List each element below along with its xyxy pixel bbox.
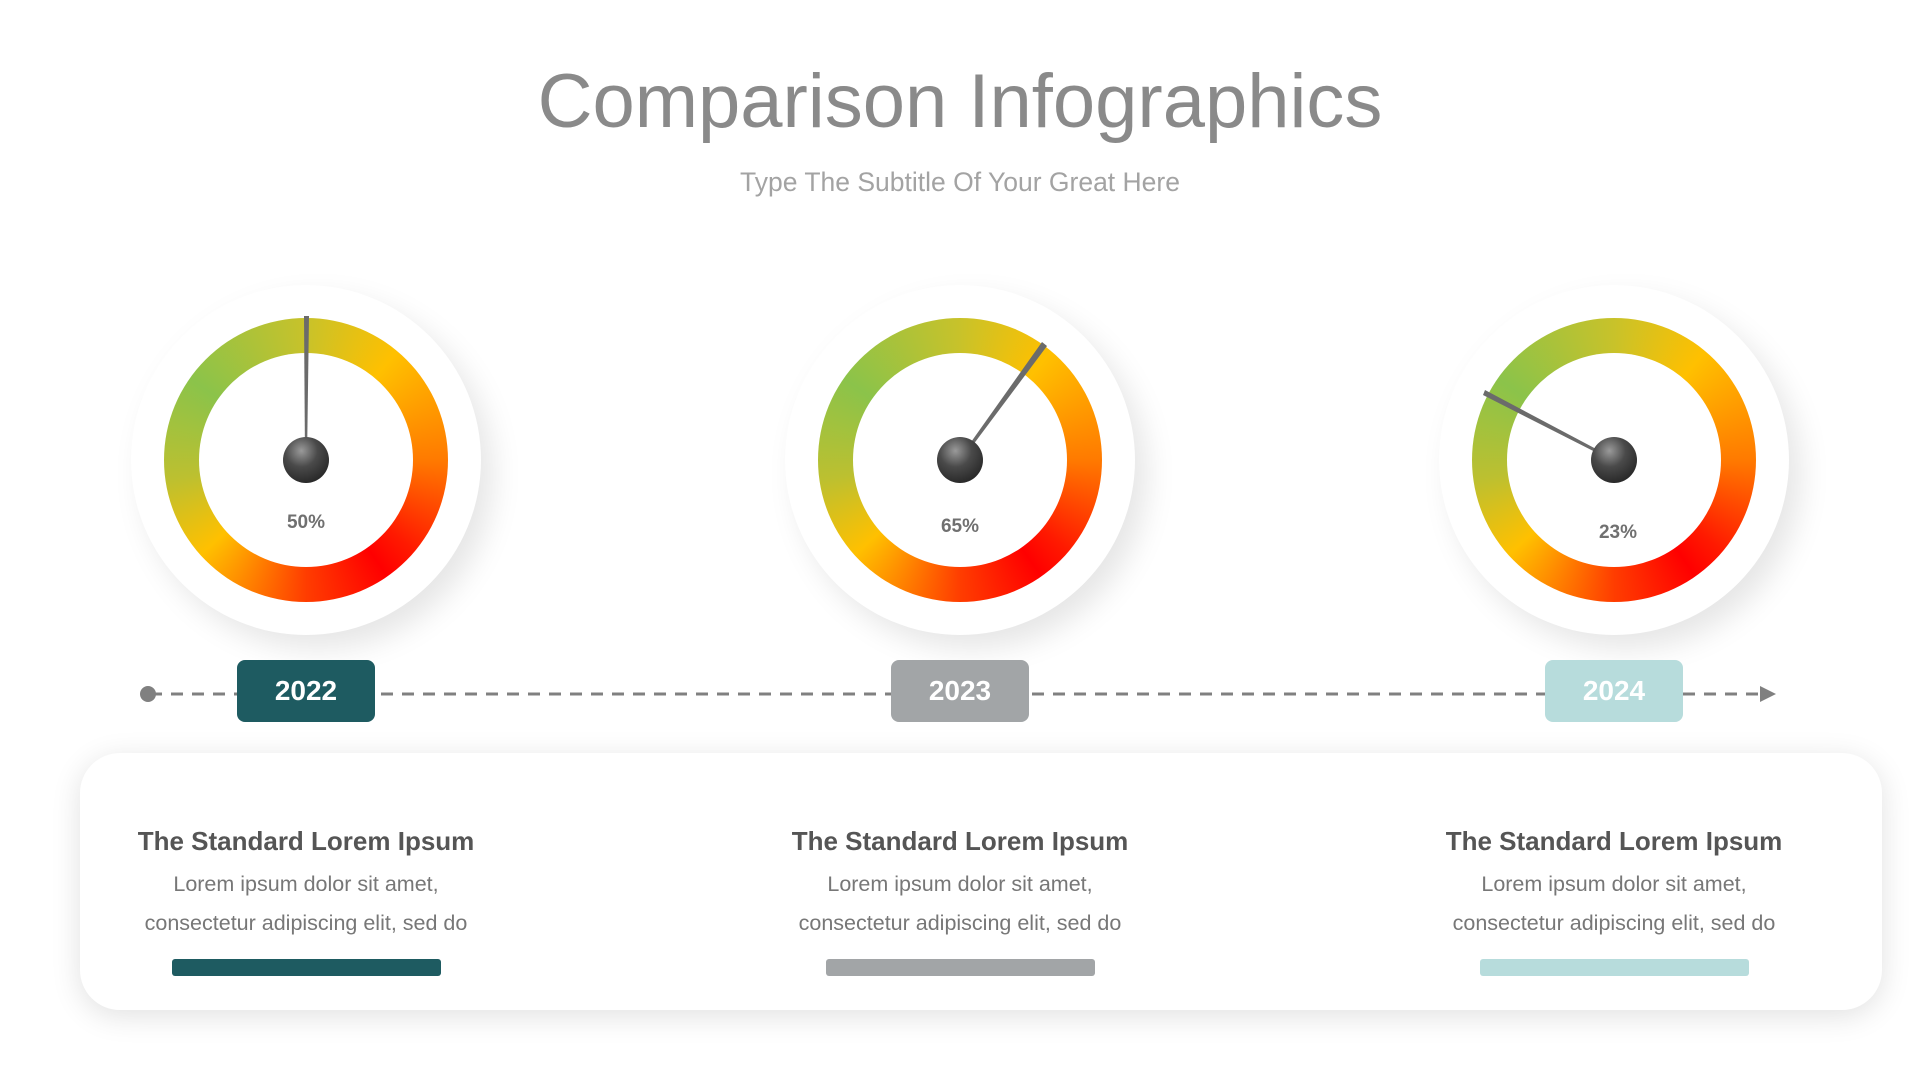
year: 2023 xyxy=(891,660,1029,722)
value: 50% xyxy=(287,512,325,533)
subtitle: Type The Subtitle Of Your Great Here xyxy=(740,167,1180,197)
needle xyxy=(283,316,329,483)
text block 1 xyxy=(138,826,474,976)
value: 65% xyxy=(941,516,979,537)
text block 3: consectetur adipiscing elit, sed do xyxy=(1453,911,1775,935)
text block 3: Lorem ipsum dolor sit amet, xyxy=(1481,872,1747,896)
year: 2022 xyxy=(237,660,375,722)
panel: descriptions xyxy=(80,753,1882,1010)
year: 2024 xyxy=(1545,660,1683,722)
text block 2 xyxy=(792,826,1128,976)
text block 3 xyxy=(1446,826,1782,976)
text block 2: The Standard Lorem Ipsum xyxy=(792,826,1128,856)
year: 2024: 2024 xyxy=(1583,675,1645,706)
year: 2022: 2022 xyxy=(275,675,337,706)
value: 23% xyxy=(1599,522,1637,543)
gauge: 2024 xyxy=(1439,285,1789,635)
text block 3: The Standard Lorem Ipsum xyxy=(1446,826,1782,856)
title: Comparison Infographics xyxy=(538,59,1382,144)
text block 1: Lorem ipsum dolor sit amet, xyxy=(173,872,439,896)
timeline xyxy=(140,686,1776,702)
needle xyxy=(1483,390,1637,483)
year: 2023: 2023 xyxy=(929,675,991,706)
text block 1: The Standard Lorem Ipsum xyxy=(138,826,474,856)
text block 2: Lorem ipsum dolor sit amet, xyxy=(827,872,1093,896)
needle xyxy=(937,342,1047,483)
gauge: 2022 xyxy=(131,285,481,635)
text block 1: consectetur adipiscing elit, sed do xyxy=(145,911,467,935)
gauge: 2023 xyxy=(785,285,1135,635)
text block 2: consectetur adipiscing elit, sed do xyxy=(799,911,1121,935)
